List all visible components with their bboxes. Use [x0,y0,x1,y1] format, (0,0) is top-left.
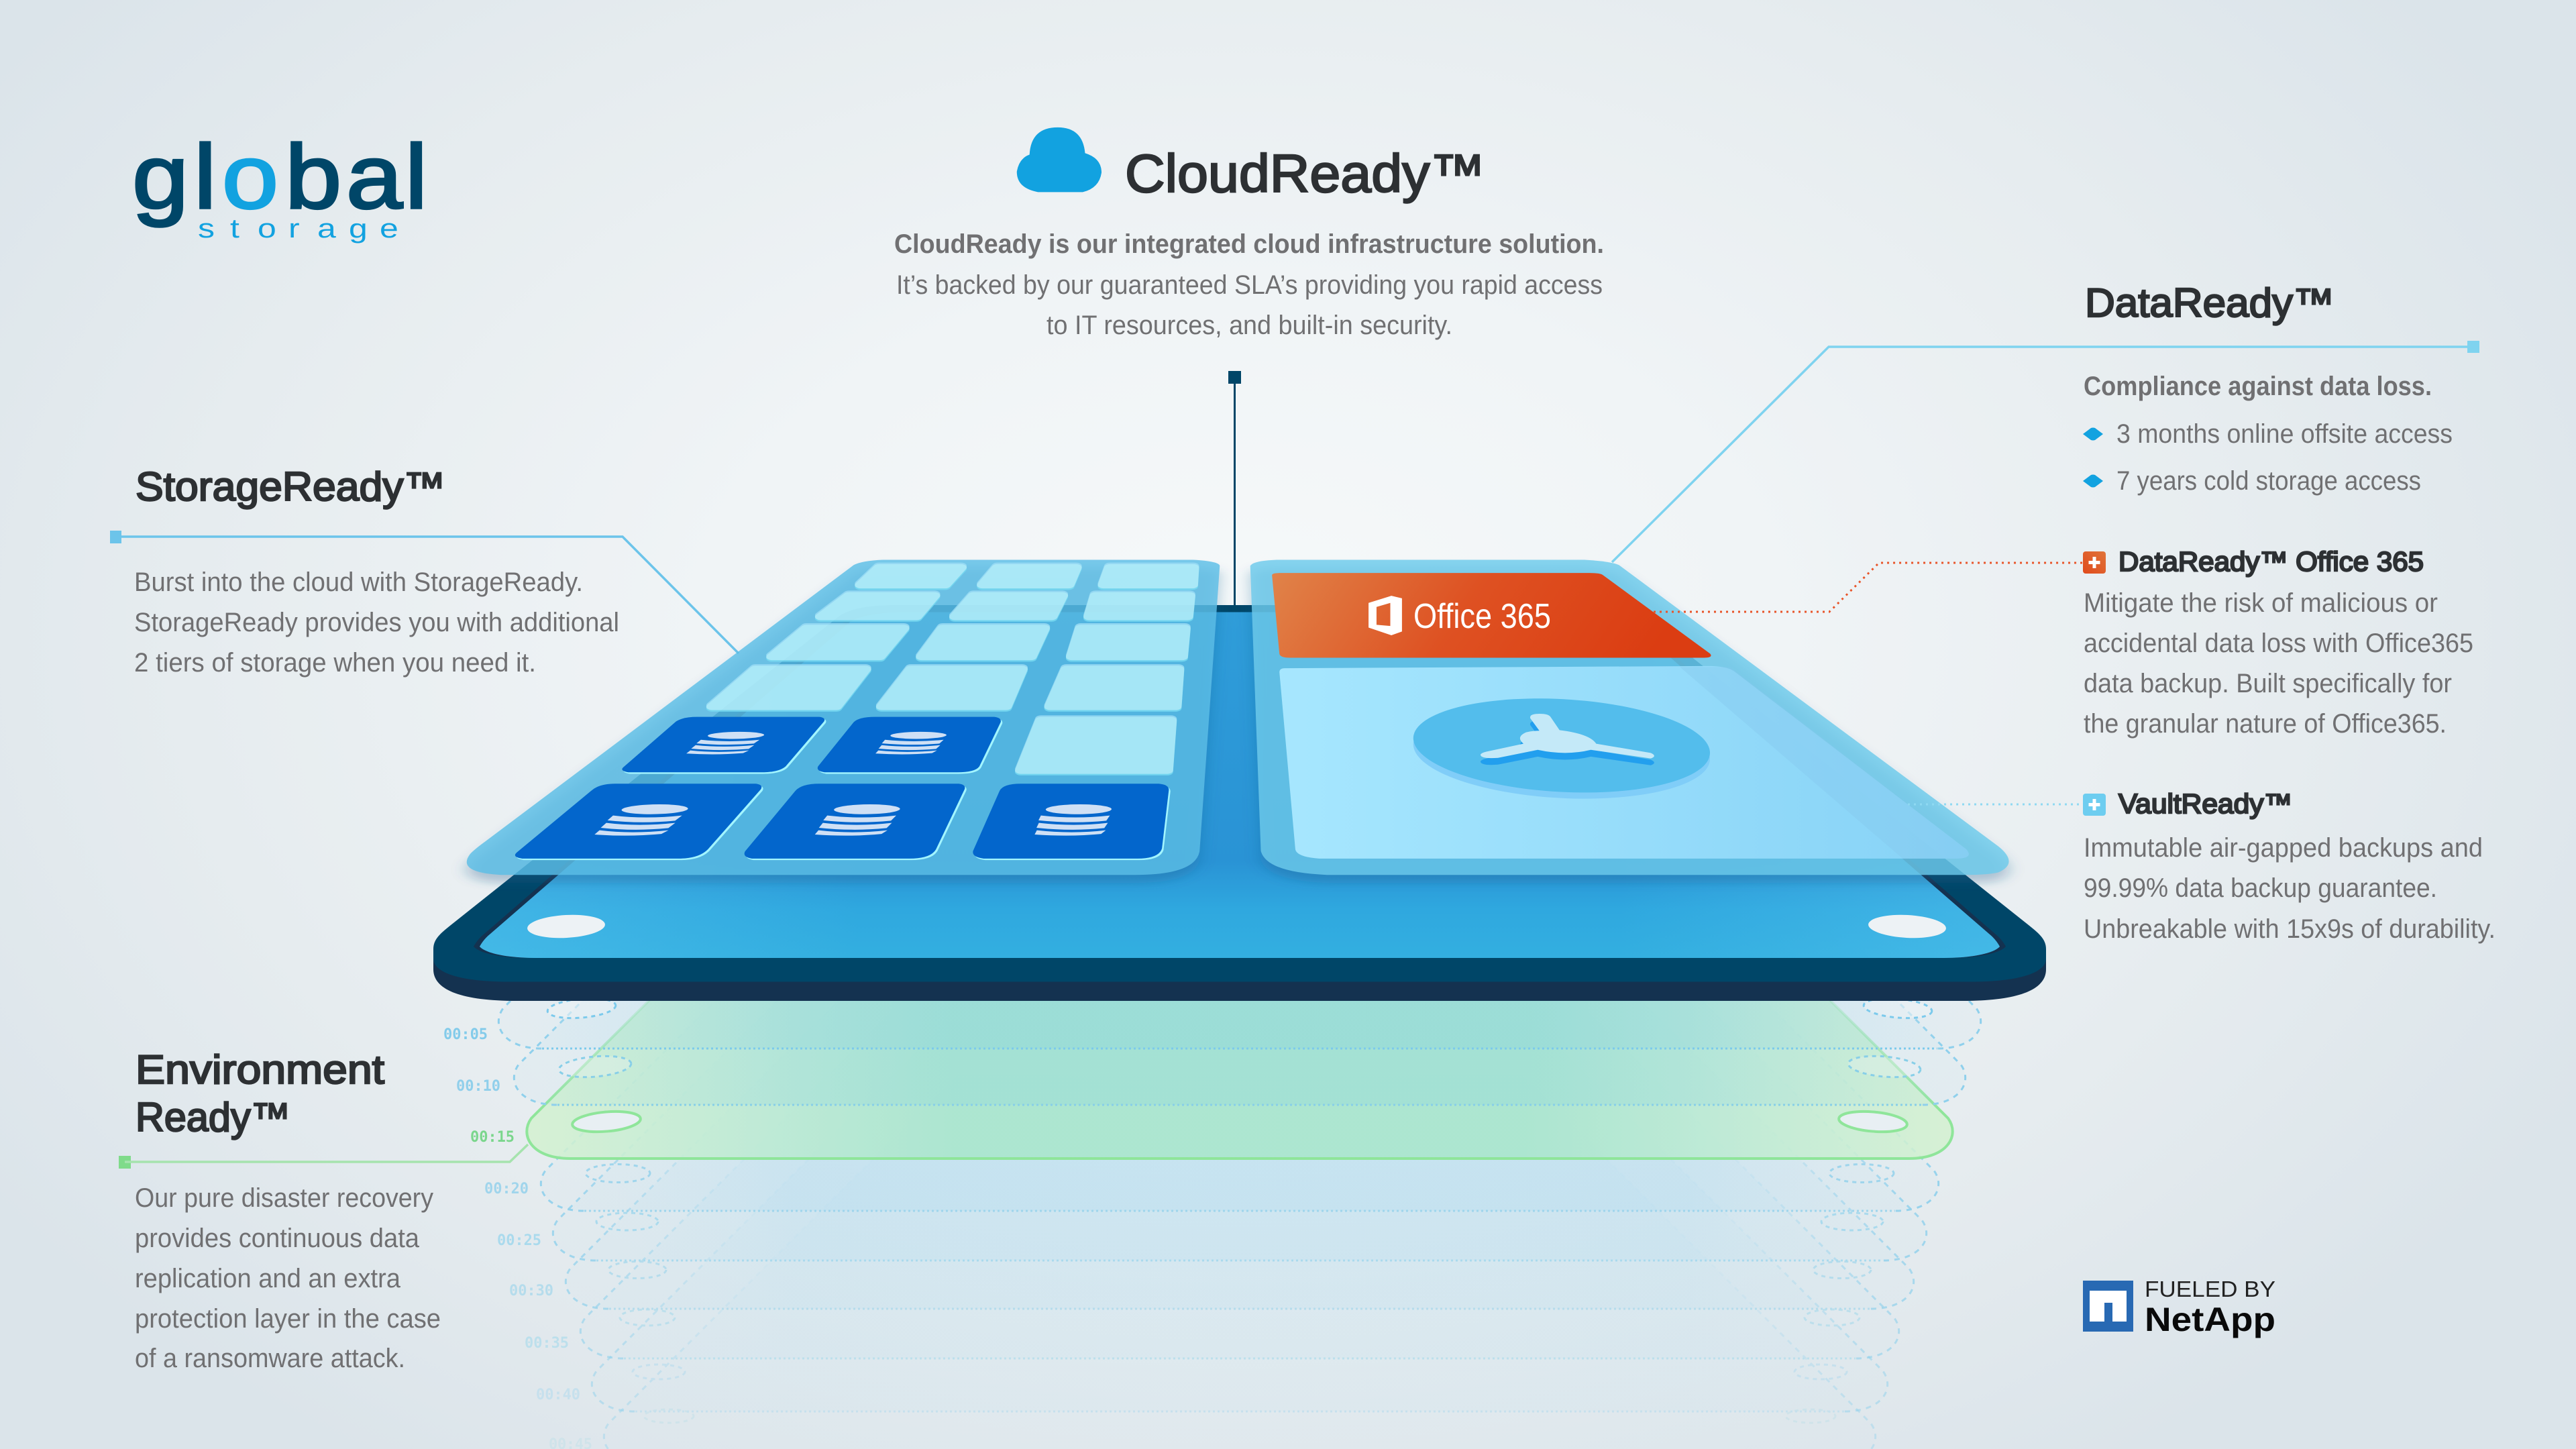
heading: VaultReady: VaultReady™ [2118,788,2292,819]
icon: Office logo [1368,596,1402,635]
connector: CloudReady [1228,371,1241,608]
snapshot plate 00:05: 00:05 [443,1026,488,1043]
base platform [433,605,2046,1001]
text block: VaultReady description: 99.99% data backup guarantee. [2084,873,2437,903]
heading: Environment Ready: Ready™ [136,1095,290,1140]
snapshot plate 00:15 (green, active): 00:15 [470,1129,515,1146]
Office 365 tile [1272,573,1711,657]
text block: Environment Ready description: protection layer in the case [135,1304,441,1334]
panel: StorageReady tray [467,559,1220,883]
panel: DataReady tray [1250,559,2009,883]
snapshot plate 00:05 [443,659,1981,1049]
text block: CloudReady description: CloudReady is our integrated cloud infrastructure solution. [894,229,1604,259]
logo: NetApp: NetApp [2145,1301,2275,1338]
text block: Environment Ready description [135,1183,441,1373]
snapshot plate 00:30: 00:30 [509,1283,553,1299]
storage tile with database icon [973,784,1171,860]
text block: StorageReady description [134,568,619,678]
snapshot plate 00:20 [484,822,1939,1211]
text block: Office 365 description: data backup. Built specifically for [2084,669,2452,698]
text block: Office 365 description [2084,588,2473,739]
connector: Office 365 [1654,563,2083,612]
icon: Office plus [2083,551,2106,574]
empty storage slots [712,566,1193,772]
connector: DataReady [1612,341,2479,562]
icon: Vault plus [2083,794,2106,816]
text block: StorageReady description: Burst into the cloud with StorageReady. [134,568,583,597]
snapshot plate 00:15 (green, active) [470,769,1953,1159]
VaultReady panel [1279,666,1969,859]
bullet: 3 months: 3 months online offsite access [2116,419,2453,449]
snapshot plate 00:40: 00:40 [536,1387,580,1403]
heading: DataReady Office 365: DataReady™ Office 365 [2118,546,2424,577]
heading: Environment Ready [136,1047,384,1140]
snapshot plate 00:40 [536,1022,1888,1411]
text block: Office 365 description: accidental data loss with Office365 [2084,629,2473,658]
snapshot plate 00:10 [456,716,1966,1105]
text block: VaultReady description: Unbreakable with 15x9s of durability. [2084,914,2496,944]
text block: CloudReady description: It’s backed by our guaranteed SLA’s providing you rapid access [896,270,1603,300]
logo: global storage: global [132,126,427,227]
heading: Environment Ready: Environment [136,1047,384,1092]
text block: Environment Ready description: provides continuous data [135,1224,420,1253]
text block: compliance [2083,372,2453,496]
snapshot plate 00:20: 00:20 [484,1181,529,1197]
text block: Environment Ready description: Our pure disaster recovery [135,1183,433,1213]
text block: Office 365 description: the granular nature of Office365. [2084,709,2447,739]
connector: StorageReady [110,531,739,653]
text block: Environment Ready description: of a ransomware attack. [135,1344,405,1373]
Office 365 label: Office 365 [1413,597,1551,636]
text block: Environment Ready description: replication and an extra [135,1264,401,1293]
storage tile with database icon [622,717,826,774]
snapshot plate 00:35 [525,969,1899,1358]
storage tile with database icon [515,784,763,860]
snapshot plate 00:25: 00:25 [497,1232,541,1249]
text block: VaultReady description [2084,833,2496,944]
snapshot plate 00:35: 00:35 [525,1335,569,1352]
vault dial [1404,690,1719,808]
bullet: 7 years: 7 years cold storage access [2116,466,2421,496]
storage tile with database icon [818,717,1002,774]
snapshot plate 00:45 [549,1075,1876,1449]
storage tile with database icon [745,784,967,860]
title: CloudReady: CloudReady™ [1125,144,1485,203]
heading: StorageReady: StorageReady™ [136,464,445,509]
text block: StorageReady description: 2 tiers of storage when you need it. [134,648,536,678]
logo: NetApp [2083,1277,2275,1338]
text block: StorageReady description: StorageReady provides you with additional [134,608,619,637]
text block: Office 365 description: Mitigate the risk of malicious or [2084,588,2438,618]
connector: Environment Ready [119,1144,528,1169]
snapshot plate 00:25 [497,871,1927,1260]
logo: NetApp: FUELED BY [2145,1277,2275,1301]
logo: global storage: storage [198,213,398,244]
snapshot plate 00:30 [509,920,1914,1309]
icon: cloud [1017,127,1102,192]
text block: CloudReady description: to IT resources, and built-in security. [1046,311,1452,340]
text block: VaultReady description: Immutable air-gapped backups and [2084,833,2483,863]
heading: DataReady: DataReady™ [2085,280,2334,325]
snapshot plate 00:10: 00:10 [456,1078,500,1095]
text block: compliance: Compliance against data loss. [2084,372,2432,401]
connector: VaultReady [1908,804,2083,805]
text block: CloudReady description [894,229,1604,340]
